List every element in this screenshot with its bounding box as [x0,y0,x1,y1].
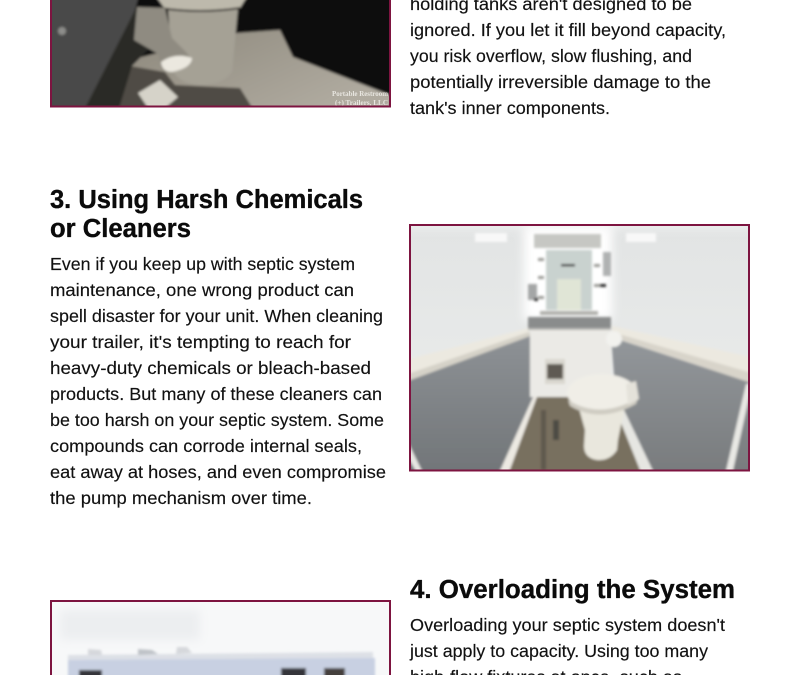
mirror [546,250,592,310]
left panel [52,0,140,106]
text block: harsh chemicals: eat away at hoses, and even compromise [50,462,386,482]
floor [508,396,642,470]
text block: harsh chemicals: spell disaster for your unit. When cleaning [50,306,383,326]
heading: 3. Using Harsh Chemicals or Cleaners: 3. Using Harsh Chemicals [50,186,363,214]
text block: harsh chemicals [50,254,386,508]
chair rail left [411,334,516,371]
heading: 4. Overloading the System: 4. Overloading the System [410,576,735,604]
wall fixtures [603,252,611,276]
heading: 3. Using Harsh Chemicals or Cleaners [50,186,363,243]
text block: harsh chemicals: the pump mechanism over time. [50,488,312,508]
cup [168,8,238,85]
toilet [578,405,625,460]
text block: harsh chemicals: heavy-duty chemicals or bleach-based [50,358,371,378]
text block: holding tanks overflow [410,0,726,118]
text block: harsh chemicals: products. But many of these cleaners can [50,384,382,404]
photo: restroom trailer interior with toilet [405,222,755,475]
text block: harsh chemicals: Even if you keep up with septic system [50,254,355,274]
toilet paper [606,331,622,347]
mirror frame tiles [534,234,601,248]
text block: harsh chemicals: maintenance, one wrong product can [50,280,354,300]
text block: harsh chemicals: your trailer, it's tempting to reach for [50,332,351,352]
chair rail right [624,333,748,370]
heading: 3. Using Harsh Chemicals or Cleaners: or Cleaners [50,215,191,243]
dark gap beside panel [86,12,149,106]
text block: overloading [409,615,725,675]
text block: harsh chemicals: compounds can corrode internal seals, [50,436,362,456]
lower wall right [610,340,748,470]
text block: holding tanks overflow: potentially irreversible damage to the [410,72,711,92]
text block: holding tanks overflow: ignored. If you let it fill beyond capacity, [410,20,726,40]
packet [138,80,178,108]
pedal [132,4,188,56]
lower wall left [411,335,534,470]
vanity [528,336,568,400]
text block: holding tanks overflow: tank's inner components. [410,98,610,118]
photo: restroom trailer exterior [51,601,390,675]
counter [528,317,611,328]
text block: overloading: Overloading your septic system doesn't [410,615,725,635]
watermark: Portable Restroom [332,89,389,98]
photo: toilet base on dark trailer floor [45,0,395,112]
text block: holding tanks overflow: you risk overflow, slow flushing, and [410,46,692,66]
photo: toilet base on dark trailer floor: (+) Trailers, LLC [335,98,388,107]
text block: harsh chemicals: be too harsh on your septic system. Some [50,410,384,430]
floor [130,28,389,106]
text block: overloading: just apply to capacity. Using too many [409,641,708,661]
